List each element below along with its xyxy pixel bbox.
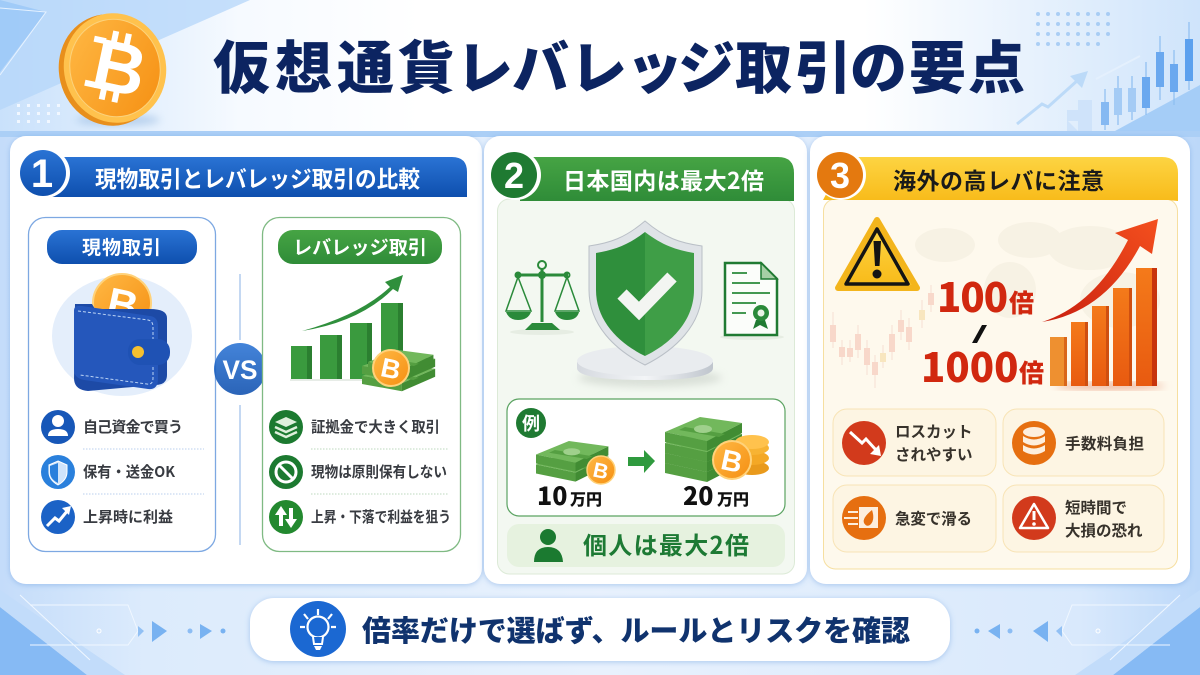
text: buy with own funds: 自己資金で買う	[83, 416, 183, 437]
list: spot points	[41, 410, 204, 534]
header band 3	[823, 157, 1178, 201]
icon: prohibition	[269, 455, 303, 489]
panel 2 heading: 日本国内は最大2倍	[563, 162, 764, 196]
inner body 2	[498, 199, 794, 574]
header band 2	[520, 157, 794, 201]
callout text: 倍率だけで選ばず、ルールとリスクを確認	[362, 608, 910, 650]
divider and VS badge: VS	[222, 355, 258, 385]
card: leverage trading	[262, 218, 460, 552]
number badge 1: 1	[31, 152, 53, 196]
title: 仮想通貨レバレッジ取引の要点	[213, 23, 1025, 105]
slash	[972, 325, 987, 343]
footer callout	[250, 598, 950, 661]
icon: wallet with coin: B	[103, 278, 142, 331]
icon: scales	[506, 261, 579, 335]
icon: small money stack with coin: B	[591, 459, 610, 484]
icon: up and down arrows	[269, 500, 303, 534]
leverage numbers	[921, 266, 1044, 394]
text: profit up or down: 上昇・下落で利益を狙う	[311, 506, 451, 527]
chart: rising green bars with money	[290, 275, 435, 391]
number badge 3	[816, 150, 866, 200]
icon: falling arrow	[842, 421, 886, 465]
text: big loss risk: 大損の恐れ	[1065, 519, 1143, 541]
panel 3 heading: 海外の高レバに注意	[893, 162, 1104, 196]
inner body 3	[824, 199, 1178, 569]
card: loss cut	[833, 409, 996, 476]
number badge 2	[491, 150, 541, 200]
icon: coin database	[1012, 421, 1056, 465]
icon: warning triangle	[838, 220, 917, 288]
icon: large money stack with coins	[665, 417, 769, 482]
chevrons left	[97, 621, 226, 642]
card: spot trading	[28, 218, 216, 552]
faint candlesticks	[830, 285, 934, 388]
text: big loss risk: 短時間で	[1065, 496, 1127, 518]
card: big loss	[1003, 485, 1164, 552]
amount: 100,000 yen: 万円	[570, 486, 602, 510]
icon: licence document	[720, 263, 784, 340]
chart: rising green bars with money: B	[378, 352, 403, 386]
panel 1 heading: 現物取引とレバレッジ取引の比較	[95, 160, 420, 194]
text: large trade on margin: 証拠金で大きく取引	[311, 416, 440, 437]
number: 1000x: 1000	[921, 336, 1018, 394]
panel 3: overseas warning	[810, 136, 1190, 584]
icon: bitcoin coin: B	[86, 24, 153, 113]
icon: person	[534, 529, 563, 562]
pill: leverage trading: レバレッジ取引	[293, 233, 427, 260]
icon: wallet with coin	[52, 274, 192, 396]
icon: layers	[269, 410, 303, 444]
amount: 100,000 yen: 10	[537, 477, 567, 513]
example box	[507, 399, 785, 516]
icon: large money stack with coins: B	[718, 444, 745, 480]
header band 1	[50, 157, 467, 197]
text: spot not held: 現物は原則保有しない	[311, 461, 447, 482]
faint world map	[915, 222, 1160, 328]
icon: person	[41, 410, 75, 444]
list: leverage points	[269, 410, 451, 534]
pill: spot trading	[47, 230, 197, 264]
card: slippage	[833, 485, 996, 552]
panel 2: Japan limit	[484, 136, 807, 584]
text: easy liquidation: ロスカット	[895, 420, 973, 442]
example badge	[516, 408, 546, 438]
icon: rising arrow	[41, 500, 75, 534]
text: fee burden: 手数料負担	[1065, 432, 1144, 454]
pill: leverage trading	[278, 230, 442, 264]
arrow	[628, 450, 655, 473]
number badge 2: 2	[504, 155, 524, 196]
decoration: top-right market chart	[1017, 12, 1193, 131]
number badge 3: 3	[830, 155, 850, 196]
panel 1: comparison	[10, 136, 482, 584]
text: profit on rise: 上昇時に利益	[83, 506, 173, 527]
example badge: 例	[522, 410, 540, 436]
text: hold and transfer: 保有・送金OK	[83, 461, 176, 482]
note text: 個人は最大2倍	[583, 526, 749, 561]
icon: light bulb	[290, 601, 346, 657]
amount: 200,000 yen: 20	[683, 477, 713, 513]
amount: 200,000 yen: 万円	[717, 486, 749, 510]
icon: pedestal and shield with check	[577, 221, 722, 387]
risk cards	[833, 409, 1164, 552]
pill: spot trading: 現物取引	[82, 233, 162, 260]
icon: bitcoin coin	[47, 2, 178, 137]
chevrons right	[974, 621, 1100, 642]
chart: rising orange bars with arrow	[1042, 219, 1165, 389]
number: 100x: 倍	[1009, 284, 1034, 320]
card: fees	[1003, 409, 1164, 476]
number: 100x: 100	[937, 266, 1007, 324]
text: easy liquidation: されやすい	[895, 443, 973, 465]
icon: speeding drop	[842, 496, 886, 540]
number badge 1	[20, 148, 70, 198]
icon: small money stack with coin	[536, 441, 615, 484]
icon: warning	[1012, 496, 1056, 540]
text: slippage in sudden moves: 急変で滑る	[895, 507, 972, 529]
icon: shield	[41, 455, 75, 489]
divider and VS badge	[214, 274, 266, 545]
number: 1000x: 倍	[1019, 354, 1044, 390]
note: individuals max 2x	[507, 524, 785, 567]
